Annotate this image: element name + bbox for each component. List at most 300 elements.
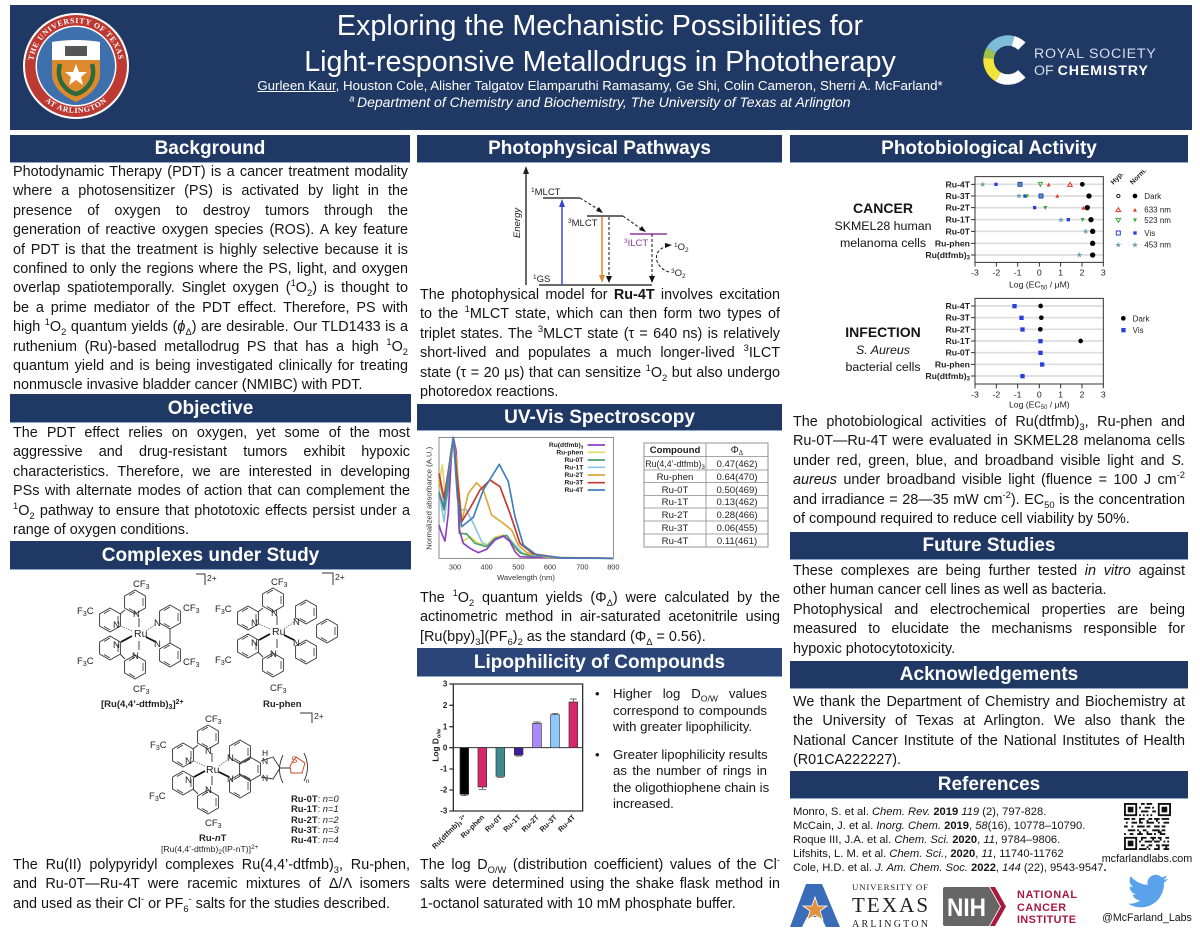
reference list: Lifshits, L. M. et al. Chem. Sci., 2020, 11, 11740-11762	[793, 848, 1064, 860]
label: cancer panel: SKMEL28 human	[834, 219, 932, 233]
energy level diagram: 3	[568, 218, 572, 225]
text: background: Photodynamic Therapy (PDT) is a cancer treatment modality	[13, 164, 408, 180]
chemical structure: Ru(dtfmb)3: N	[132, 651, 139, 662]
reference list	[793, 806, 1107, 874]
chemical structure: Ru-nT: N	[205, 746, 212, 757]
dot plot: infection EC50: 50	[1041, 405, 1048, 411]
dot plot: infection EC50: Ru-2T	[945, 324, 971, 334]
text: lipophilicity: The log DO/W (distribution coefficient) values of the Cl-	[420, 855, 780, 875]
header banner	[10, 5, 1192, 130]
logo: UT Arlington: TEXAS	[852, 893, 928, 917]
dot plot: cancer EC50: ★	[1131, 241, 1139, 250]
chemical structure: Ru-nT: 3	[155, 796, 159, 803]
UV-Vis absorbance chart: Ru-2T	[564, 472, 583, 479]
dot plot: infection EC50: 0	[1037, 389, 1042, 399]
reference list: Monro, S. et al. Chem. Rev. 2019 119 (2), 797-828.	[793, 806, 1046, 818]
dot plot: cancer EC50	[925, 167, 1171, 291]
bar chart: log D: Ru-2T	[520, 812, 541, 834]
reference list: Roque III, J.A. et al. Chem. Sci. 2020, 11, 9784–9806.	[793, 834, 1060, 846]
text: background: overlap spatiotemporally. Singlet oxygen (1O2) is thought to	[13, 279, 408, 298]
dot plot: infection EC50: / μM)	[1047, 399, 1070, 409]
chemical structure: Ru-phen: 2+	[335, 572, 345, 582]
text: objective: 1O2 pathway to ensure that phototoxic effects persist under a	[13, 501, 410, 520]
bar chart: log D: Ru-0T	[483, 812, 504, 834]
reference list: McCain, J. et al. Inorg. Chem. 2019, 58(16), 10778–10790.	[793, 820, 1085, 832]
table: singlet oxygen quantum yields: Ru-phen	[657, 472, 693, 483]
dot plot: cancer EC50: Ru-4T	[945, 179, 971, 189]
text: acknowledgements: National Cancer Institute of the National Institutes of Health	[793, 733, 1185, 749]
chemical structure: Ru(dtfmb)3: CF	[183, 603, 196, 614]
UV-Vis absorbance chart: Ru-4T	[564, 487, 583, 494]
bullet list: lipophilicity: Higher log DO/W values	[613, 686, 767, 704]
dot plot: cancer EC50: 3	[967, 256, 971, 262]
dot plot: cancer EC50: 453 nm	[1144, 241, 1171, 250]
UV-Vis absorbance chart: 300	[449, 562, 461, 571]
icon: QR code	[1124, 803, 1171, 850]
chemical structure: Ru(dtfmb)3: 3	[196, 608, 200, 615]
text: background: be a prime mediator of the PDT effect. Therefore, PS with	[13, 300, 408, 316]
section heading: Photophysical Pathways: Photophysical Pathways	[488, 138, 711, 159]
chemical structure: Ru-phen: F	[215, 655, 221, 666]
chemical structure: Ru(dtfmb)3: C	[87, 656, 94, 667]
icon: RSC logo: ROYAL SOCIETY	[1034, 46, 1156, 62]
chemical structure: Ru-nT: (IP-nT)]	[222, 844, 251, 854]
chemical structure: Ru-nT: 3	[156, 745, 160, 752]
UV-Vis absorbance chart: 600	[544, 562, 556, 571]
chemical structure: Ru-nT: Ru-nT	[199, 833, 227, 844]
label: infection panel: INFECTION	[845, 324, 921, 340]
bar chart: log D: Ru-4T	[556, 812, 577, 834]
chemical structure: Ru-phen: 3	[221, 660, 225, 667]
chemical structure: Ru-nT: n	[306, 779, 309, 785]
bar chart: log D: Ru(dtfmb)	[430, 820, 461, 851]
UV-Vis absorbance chart: Ru-phen	[556, 449, 583, 456]
dot plot: cancer EC50: Hyp.	[1110, 171, 1125, 186]
chemical structure: Ru-nT: Ru-1T: n=1	[291, 803, 339, 814]
bar chart: log D: Log D	[431, 738, 441, 762]
chemical structure: Ru(dtfmb)3: CF	[133, 684, 146, 695]
chemical structure: Ru-nT: N	[262, 773, 268, 783]
dot plot: infection EC50: Ru-0T	[945, 348, 971, 358]
text: photobiological: and irradiance = 28—35 mW cm-2). EC50 is the concentration	[793, 490, 1185, 510]
chemical structure: Ru-nT: 3	[218, 823, 222, 830]
text: background: generation of reactive oxygen species (ROS). A key feature	[13, 222, 408, 238]
icon: RSC logo: OF CHEMISTRY	[1034, 63, 1149, 79]
dot plot: cancer EC50: Ru-phen	[935, 238, 970, 248]
dot plot: cancer EC50: Ru(dtfmb)	[925, 250, 967, 260]
bullet list: lipophilicity: with greater lipophilicity.	[613, 719, 752, 734]
chemical structure: Ru-nT: H	[262, 748, 268, 758]
chemical structure: Ru(dtfmb)3: N	[133, 609, 140, 620]
section heading: Objective: Objective	[168, 398, 253, 419]
text: objective: range of oxygen conditions.	[13, 522, 189, 538]
text: background: of PDT is that the treatment is highly selective because it is	[13, 242, 408, 258]
chemical structure: Ru-phen: 3	[283, 688, 287, 695]
affiliation: a Department of Chemistry and Biochemistry, The University of Texas at Arlington	[349, 93, 851, 110]
section heading: Lipophilicity of Compounds: Lipophilicity of Compounds	[474, 652, 725, 673]
energy level diagram: MLCT	[535, 187, 561, 198]
chemical structure: Ru-phen	[215, 572, 345, 710]
chemical structure: Ru-nT: Ru-2T: n=2	[291, 814, 339, 825]
chemical structure: Ru-nT: C	[159, 791, 166, 802]
table: singlet oxygen quantum yields	[644, 443, 768, 547]
dot plot: cancer EC50: ★	[1082, 227, 1089, 236]
text: objective: characteristics. Therefore, we are interested in developing	[13, 464, 410, 480]
text: future studies: Photophysical and electrochemical properties are being	[793, 602, 1185, 618]
chemical structure: Ru(dtfmb)3: N	[154, 639, 161, 650]
dot plot: infection EC50: Ru-4T	[945, 301, 971, 311]
dot plot: cancer EC50: Ru-3T	[945, 191, 971, 201]
text: photophysical: photoredox reactions.	[420, 384, 558, 400]
chemical structure: Ru(dtfmb)3: N	[113, 620, 120, 631]
chemical structure: Ru-nT: S	[291, 755, 297, 766]
chemical structure: Ru(dtfmb)3: N	[154, 618, 161, 629]
table: singlet oxygen quantum yields: 0.64(470)	[716, 472, 758, 483]
website label: mcfarlandlabs.com	[1102, 853, 1192, 865]
text: acknowledgements: the University of Texas at Arlington. We also thank the	[793, 713, 1185, 729]
bar chart: log D: Ru-1T	[501, 812, 523, 834]
dot plot: infection EC50: Dark	[1133, 314, 1150, 323]
dot plot: cancer EC50: / μM)	[1047, 280, 1070, 290]
text: lipophilicity: salts were determined using the shake flask method in	[420, 876, 780, 892]
UV-Vis absorbance chart: 800	[607, 562, 619, 571]
dot plot: infection EC50: 3	[967, 377, 971, 383]
text: lipophilicity	[420, 855, 780, 912]
dot plot: cancer EC50: Ru-1T	[945, 215, 971, 225]
chemical structure: Ru(dtfmb)3: Ru	[134, 628, 148, 640]
dot plot: infection EC50: -2	[992, 389, 1000, 399]
dot plot: infection EC50: 1	[1058, 389, 1063, 399]
text: background: high 1O2 quantum yields (ϕΔ) are desirable. Our TLD1433 is a	[13, 317, 408, 337]
chemical structure: Ru-phen: N	[293, 638, 300, 649]
chemical structure: Ru-nT: 2+	[251, 844, 259, 851]
text: acknowledgements	[793, 694, 1185, 768]
bullet list: lipophilicity: increased.	[613, 796, 674, 811]
chemical structure: Ru(dtfmb)3: F	[77, 606, 83, 617]
table: singlet oxygen quantum yields: 0.28(466)	[716, 510, 758, 521]
icon: university seal: AT ARLINGTON	[45, 98, 106, 113]
chemical structure: Ru-nT: N	[205, 785, 212, 796]
text: UV-Vis: actinometric method in air-saturated acetonitrile using	[420, 609, 780, 625]
dot plot: cancer EC50: ★	[1115, 241, 1122, 250]
logo: NIH National Cancer Institute: NATIONAL	[1017, 889, 1077, 901]
text: background: nonmuscle invasive bladder cancer (NMIBC) with PDT.	[13, 377, 362, 393]
text: photophysical: The photophysical model for Ru-4T involves excitation	[420, 287, 780, 303]
energy level diagram: 1	[533, 274, 537, 281]
energy level diagram: MLCT	[572, 218, 598, 229]
text: background: ruthenium (Ru)-based metallodrug PS that has a high 1O2	[13, 337, 408, 357]
label: cancer panel: melanoma cells	[840, 236, 926, 250]
energy level diagram: ILCT	[628, 238, 648, 249]
dot plot: cancer EC50: 1	[1058, 268, 1063, 278]
UV-Vis absorbance chart: Ru-0T	[564, 457, 583, 464]
bar chart: log D: 1	[443, 722, 448, 731]
chemical structure: Ru-phen: 3	[284, 582, 288, 589]
table: singlet oxygen quantum yields: Ru(4,4’-dtfmb)	[645, 459, 701, 469]
section heading: Lipophilicity of Compounds	[417, 648, 782, 677]
dot plot: infection EC50: Log (EC	[1009, 399, 1041, 409]
text: UV-Vis: [Ru(bpy)3](PF6)2 as the standard (ΦΔ = 0.56).	[420, 629, 706, 647]
logo: NIH National Cancer Institute: NIH	[947, 894, 986, 922]
chemical structure: Ru-nT: CF	[205, 714, 218, 725]
icon: twitter bird	[1128, 875, 1168, 907]
section heading: Objective	[10, 394, 411, 423]
text: complexes: and used as their Cl- or PF6- salts for the studies described.	[13, 894, 390, 914]
icon: RSC logo	[989, 41, 1156, 80]
chemical structure: Ru-nT: C	[160, 740, 167, 751]
dot plot: cancer EC50: 2	[1080, 268, 1085, 278]
dot plot: infection EC50: Ru-1T	[945, 336, 971, 346]
bar chart: log D: -3	[440, 807, 448, 816]
section heading: Acknowledgements: Acknowledgements	[900, 664, 1078, 685]
text: complexes	[13, 857, 410, 914]
chemical structure: Ru-phen: F	[215, 604, 221, 615]
bar chart: log D: Ru-phen	[459, 812, 486, 840]
authors: Gurleen Kaur, Houston Cole, Alisher Talgatov Elamparuthi Ramasamy, Ge Shi, Colin Cameron, Sherri A. McFarland*	[257, 78, 943, 93]
section heading: UV-Vis Spectroscopy: UV-Vis Spectroscopy	[504, 407, 695, 428]
UV-Vis absorbance chart: 3	[581, 444, 584, 449]
text: photobiological	[793, 414, 1185, 527]
table: singlet oxygen quantum yields: 0.50(469)	[716, 485, 758, 496]
chemical structure: Ru(dtfmb)3: 3	[83, 661, 87, 668]
text: photophysical: state (τ = 20 μs) that can sensitize 1O2 but also undergo	[420, 363, 780, 382]
dot plot: cancer EC50: -2	[992, 268, 1000, 278]
chemical structure: Ru(dtfmb)3: CF	[133, 579, 146, 590]
label: infection panel: bacterial cells	[845, 360, 921, 374]
text: future studies	[793, 563, 1185, 657]
UV-Vis absorbance chart: 400	[481, 562, 493, 571]
text: acknowledgements: (R01CA222227).	[793, 752, 901, 768]
energy level diagram: 2	[685, 247, 689, 254]
logo: UT Arlington: ARLINGTON	[852, 919, 928, 930]
chemical structure: Ru(dtfmb)3: 3	[83, 611, 87, 618]
text: complexes: The Ru(II) polypyridyl complexes Ru(4,4’-dtfmb)3, Ru-phen,	[13, 857, 410, 875]
label: cancer panel: CANCER	[853, 200, 913, 216]
chemical structure: Ru-nT: Ru-3T: n=3	[291, 824, 339, 835]
chemical structure: Ru(dtfmb)3: 2+	[207, 573, 217, 583]
logo: UT Arlington: UNIVERSITY OF	[852, 882, 928, 892]
dot plot: cancer EC50: 523 nm	[1144, 216, 1171, 225]
table: singlet oxygen quantum yields: 0.06(455)	[716, 523, 758, 534]
section heading: UV-Vis Spectroscopy	[417, 404, 782, 431]
dot plot: cancer EC50: -1	[1014, 268, 1022, 278]
chemical structure: Ru-phen: N	[251, 638, 258, 649]
chemical structure: Ru-nT	[149, 711, 339, 856]
energy level diagram: 1	[674, 242, 678, 249]
dot plot: infection EC50: Ru(dtfmb)	[925, 371, 967, 381]
bar chart: log D: Ru-3T	[538, 812, 559, 834]
table: singlet oxygen quantum yields: Ru-3T	[662, 523, 688, 534]
logo: NIH National Cancer Institute: CANCER	[1017, 902, 1066, 914]
table: singlet oxygen quantum yields: Ru-1T	[662, 497, 688, 508]
bar chart: log D: 3	[458, 821, 464, 827]
text: UV-Vis	[420, 588, 780, 647]
chemical structure: Ru-nT: Ru-4T: n=4	[291, 834, 339, 845]
table: singlet oxygen quantum yields: Compound	[650, 445, 700, 456]
section heading: Background: Background	[155, 138, 265, 159]
chemical structure: Ru-nT: CF	[205, 818, 218, 829]
label: cancer panel	[834, 200, 932, 250]
section heading: Acknowledgements	[790, 661, 1188, 689]
bar chart: log D: -2	[440, 786, 448, 795]
section heading: Background	[10, 135, 410, 163]
twitter handle: @McFarland_Labs	[1102, 912, 1192, 924]
chemical structure: Ru(dtfmb)3: 2+	[176, 699, 184, 706]
dot plot: cancer EC50: 3	[1101, 268, 1106, 278]
UV-Vis absorbance chart: Ru-3T	[564, 480, 583, 487]
UV-Vis absorbance chart: Ru(dtfmb)	[549, 442, 581, 449]
poster title	[304, 10, 896, 78]
bar chart: log D: 0	[443, 743, 448, 752]
table: singlet oxygen quantum yields: Ru-0T	[662, 485, 688, 496]
chemical structure: Ru(dtfmb)3: [Ru(4,4’-dtfmb)	[101, 699, 169, 710]
bar chart: log D	[430, 680, 583, 852]
UV-Vis absorbance chart	[425, 437, 619, 582]
UV-Vis absorbance chart: Wavelength (nm)	[497, 573, 555, 582]
bullet list: lipophilicity: correspond to compounds	[613, 702, 767, 718]
section heading: Photobiological Activity: Photobiological Activity	[881, 138, 1097, 159]
text: background	[13, 164, 408, 393]
section heading: Future Studies	[790, 532, 1188, 560]
energy level diagram: O	[675, 268, 682, 279]
chemical structure: Ru-phen: C	[225, 655, 232, 666]
chemical structure: Ru-phen: C	[225, 604, 232, 615]
dot plot: infection EC50: Ru-3T	[945, 313, 971, 323]
dot plot: infection EC50: Ru-phen	[935, 359, 970, 369]
chemical structure: Ru-phen: N	[251, 618, 258, 629]
table: singlet oxygen quantum yields: Ru-4T	[662, 536, 688, 547]
table: singlet oxygen quantum yields: 0.47(462)	[716, 459, 758, 470]
dot plot: cancer EC50: 50	[1041, 285, 1048, 291]
section heading: Complexes under Study	[10, 541, 411, 570]
text: background: quantum yield and is being investigated clinically for treating	[13, 358, 408, 374]
energy level diagram: 2	[682, 273, 686, 280]
dot plot: cancer EC50: Vis	[1144, 229, 1155, 238]
text: background: presence of oxygen to destroy tumors through the	[13, 203, 408, 219]
chemical structure: Ru-phen: N	[293, 617, 300, 628]
section heading: Future Studies: Future Studies	[922, 535, 1056, 556]
dot plot: cancer EC50: 633 nm	[1144, 206, 1171, 215]
text: lipophilicity: 1-octanol saturated with 10 mM phosphate buffer.	[420, 896, 736, 912]
text: future studies: hypoxic photocytotoxicity.	[793, 641, 955, 657]
chemical structure: Ru-nT: 2+	[314, 711, 324, 721]
dot plot: infection EC50: Vis	[1133, 326, 1144, 335]
chemical structure: Ru(dtfmb)3: C	[87, 606, 94, 617]
table: singlet oxygen quantum yields: 0.13(462)	[716, 497, 758, 508]
text: photobiological: of compound required to reduce cell viability by 50%.	[793, 511, 1130, 527]
chemical structure: Ru-nT: N	[227, 774, 234, 785]
section heading: Photophysical Pathways	[417, 135, 782, 163]
energy level diagram: GS	[537, 274, 550, 285]
text: objective: aggressive and drug-resistant tumors exhibit hypoxic	[13, 444, 410, 460]
dot plot: cancer EC50: ★	[1015, 192, 1023, 201]
chemical structure: Ru-nT: Ru-0T: n=0	[291, 793, 339, 804]
chemical structure: Ru-phen: N	[271, 608, 278, 619]
reference list: Cole, H.D. et al. J. Am. Chem. Soc. 2022, 144 (22), 9543-9547.	[793, 862, 1107, 874]
chemical structure: Ru-nT: Ru	[206, 764, 220, 776]
icon: university seal: THE UNIVERSITY OF TEXAS	[28, 18, 124, 60]
dot plot: cancer EC50: Ru-0T	[945, 226, 971, 236]
chemical structure: Ru-nT: N	[262, 756, 268, 766]
logo: NIH National Cancer Institute: INSTITUTE	[1017, 914, 1076, 926]
chemical structure: Ru-nT: F	[150, 740, 156, 751]
chemical structure: Ru(dtfmb)3: CF	[183, 657, 196, 668]
dot plot: infection EC50: -1	[1014, 389, 1022, 399]
chemical structure: Ru(dtfmb)3: 3	[196, 662, 200, 669]
icon: university seal	[23, 13, 129, 119]
chemical structure: Ru-nT: N	[185, 775, 192, 786]
chemical structure: Ru(dtfmb)3	[77, 573, 217, 711]
dot plot: cancer EC50: 0	[1037, 268, 1042, 278]
bullet list: lipophilicity: •	[595, 686, 600, 701]
text: background: where a photosensitizer (PS) is activated by light in the	[13, 183, 408, 199]
label: infection panel	[845, 324, 921, 374]
bullet list: lipophilicity: the oligothiophene chain is	[613, 780, 769, 794]
dot plot: cancer EC50: Dark	[1144, 192, 1161, 201]
chemical structure: Ru-nT: 3	[218, 719, 222, 726]
dot plot: cancer EC50: Norm.	[1129, 167, 1148, 186]
bar chart: log D: -1	[440, 765, 448, 774]
chemical structure: Ru-phen: 3	[221, 609, 225, 616]
bar chart: log D: 3	[443, 680, 448, 689]
energy level diagram	[512, 166, 689, 285]
text: photobiological: The photobiological activities of Ru(dtfmb)3, Ru-phen and	[793, 414, 1185, 432]
bar chart: log D: 2	[443, 701, 448, 710]
text: complexes: and Ru-0T—Ru-4T were racemic mixtures of Δ/Λ isomers	[13, 876, 410, 892]
text: photobiological: aureus under broadband visible light (fluence = 100 J cm-2	[793, 470, 1185, 488]
chemical structure: Ru(dtfmb)3: N	[113, 640, 120, 651]
table: singlet oxygen quantum yields: 3	[701, 465, 705, 471]
dot plot: infection EC50: 3	[1101, 389, 1106, 399]
text: photophysical	[420, 287, 780, 400]
poster title: Exploring the Mechanistic Possibilities for	[337, 10, 863, 42]
dot plot: infection EC50	[925, 298, 1150, 411]
text: photophysical: to the 1MLCT state, which can then form two types of	[420, 305, 780, 322]
dot plot: cancer EC50: ★	[1076, 251, 1083, 260]
section heading: References	[790, 771, 1188, 799]
bar chart: log D: 2+	[457, 813, 467, 823]
text: photobiological: under red, green, blue, and broadband visible light and S.	[793, 453, 1185, 469]
text: objective	[13, 425, 410, 538]
text: future studies: These complexes are being further tested in vitro against	[793, 563, 1185, 579]
chemical structure: Ru-phen: N	[270, 649, 277, 660]
energy level diagram: O	[678, 242, 685, 253]
UV-Vis absorbance chart: Normalized absorbance (A.U.)	[425, 446, 434, 550]
dot plot: infection EC50: -3	[971, 389, 979, 399]
chemical structure: Ru-nT: N	[185, 756, 192, 767]
table: singlet oxygen quantum yields: Ru-2T	[662, 510, 688, 521]
dot plot: cancer EC50: Ru-2T	[945, 203, 971, 213]
text: future studies: measured to elucidate the mechanisms responsible for	[793, 621, 1185, 637]
UV-Vis absorbance chart: 500	[512, 562, 524, 571]
section heading: References: References	[938, 774, 1040, 795]
poster title: Light-responsive Metallodrugs in Phototherapy	[304, 46, 896, 78]
text: photophysical: short-lived and populates a much longer-lived 3ILCT	[420, 343, 780, 361]
text: photobiological: Ru-0T—Ru-4T were evaluated in SKMEL28 melanoma cells	[793, 433, 1185, 449]
energy level diagram: 3	[624, 238, 628, 245]
text: photophysical: triplet states. The 3MLCT state (τ = 640 ns) is relatively	[420, 324, 780, 342]
chemical structure: Ru-phen: Ru-phen	[263, 699, 302, 710]
text: acknowledgements: We thank the Department of Chemistry and Biochemistry at	[793, 694, 1185, 710]
table: singlet oxygen quantum yields: Δ	[739, 449, 744, 457]
energy level diagram: 3	[671, 268, 675, 275]
dot plot: cancer EC50: Log (EC	[1009, 280, 1041, 290]
dot plot: infection EC50: 2	[1080, 389, 1085, 399]
chemical structure: Ru(dtfmb)3: 3	[146, 584, 150, 591]
chemical structure: Ru(dtfmb)3: F	[77, 656, 83, 667]
energy level diagram: Energy	[512, 207, 523, 238]
chemical structure: Ru-nT: F	[149, 791, 155, 802]
